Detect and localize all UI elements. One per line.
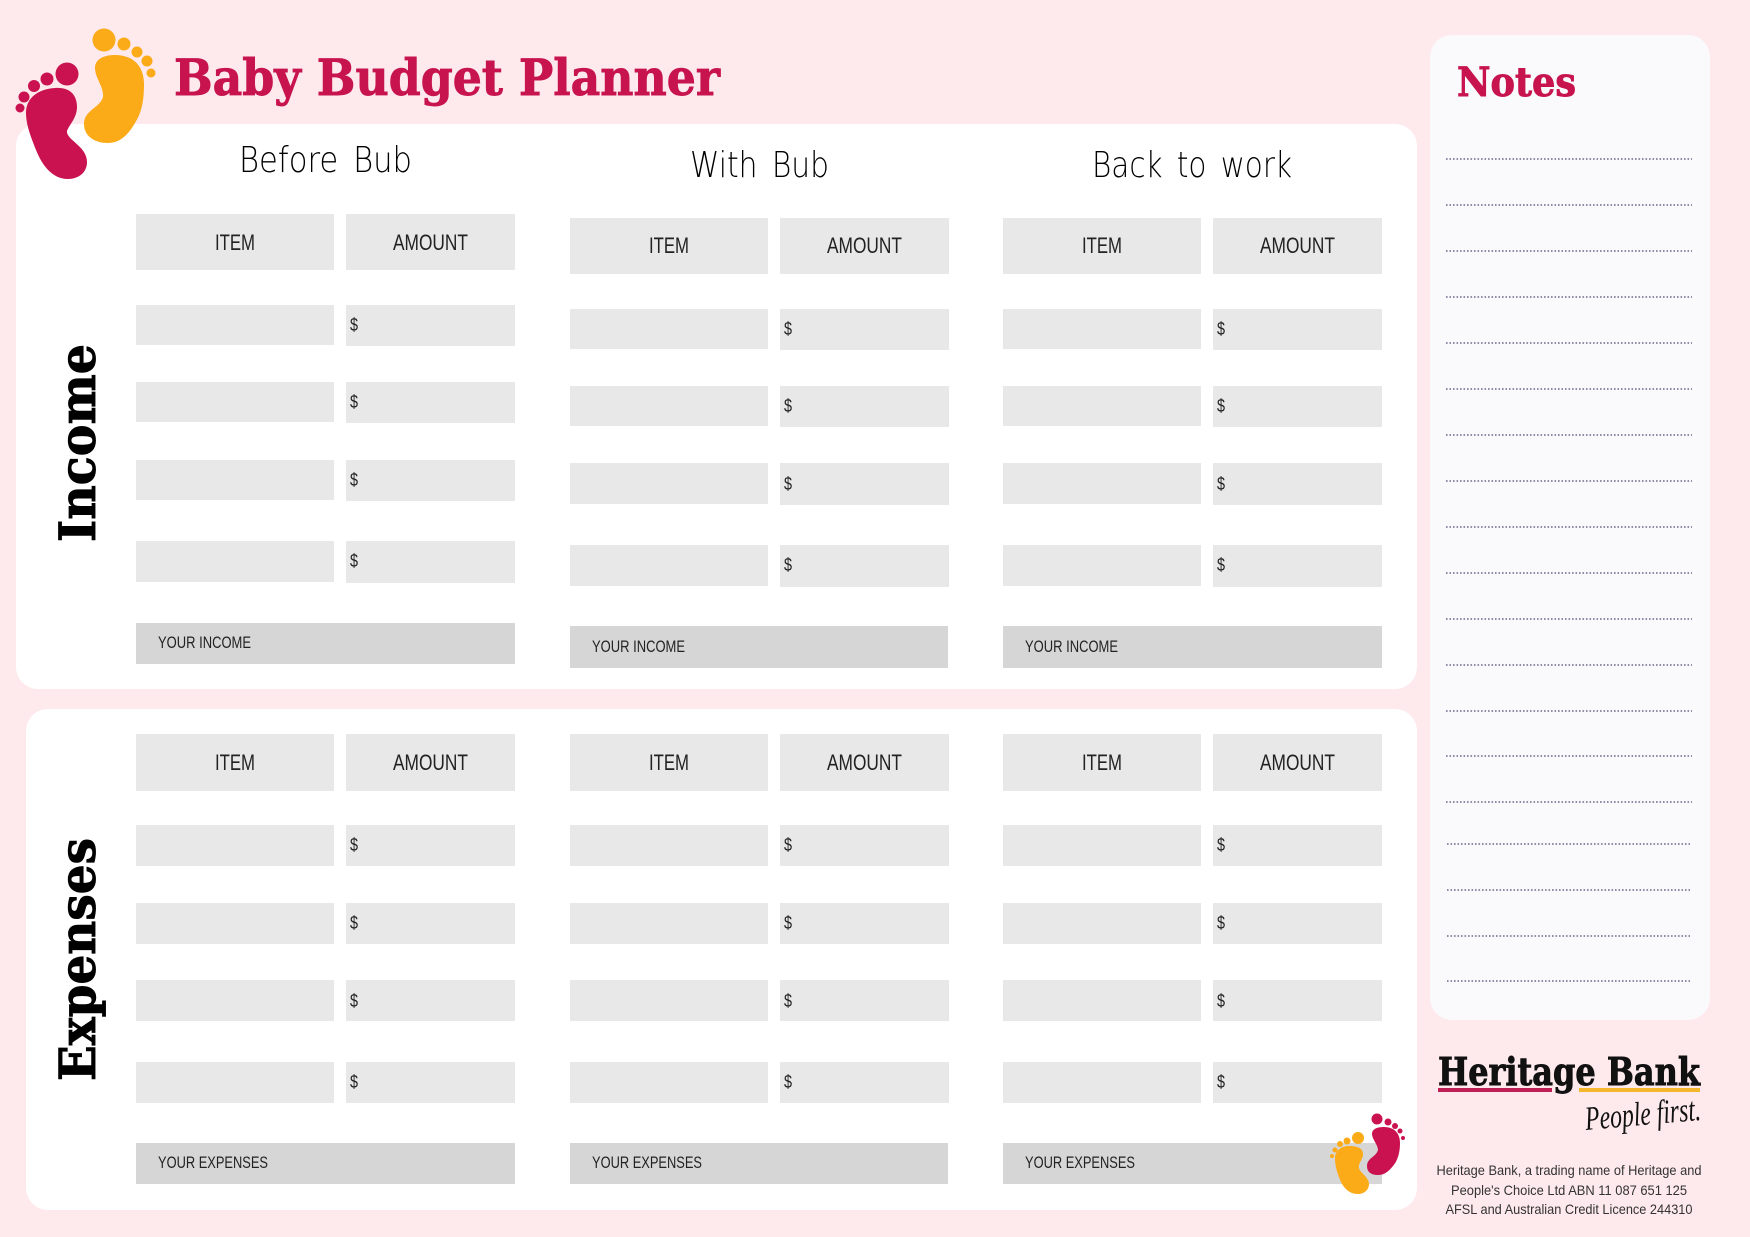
heading: notes: Notes [1457,59,1576,106]
row 1: $ [784,835,792,855]
total: your income: YOUR INCOME [158,633,251,652]
note lines [1446,159,1692,981]
row 1: $ [350,835,358,855]
row 3 [136,460,515,501]
table header: ITEM [215,750,255,775]
row 1: $ [784,319,792,339]
table header: AMOUNT [827,750,902,775]
table header [570,734,949,791]
icon: small baby feet [1330,1114,1405,1194]
icon: large baby feet [16,28,156,179]
row 4: $ [350,551,358,571]
row 2 [1003,386,1382,427]
row 4 [1003,545,1382,587]
row 4: $ [1217,555,1225,575]
row 2 [136,382,515,423]
heading: income: Income [48,344,107,542]
column: expenses before bub [136,734,515,1184]
table header [570,218,949,274]
row 2: $ [784,913,792,933]
row 3: $ [784,474,792,494]
row 4 [1003,1062,1382,1103]
column: income before bub [136,140,515,664]
total: your income [1003,626,1382,668]
row 2: $ [350,392,358,412]
table header [1003,218,1382,274]
row 1: $ [350,315,358,335]
table header: AMOUNT [827,233,902,258]
column: income with bub [570,145,949,668]
panel: notes [1430,35,1710,1020]
table header: AMOUNT [1260,750,1335,775]
legal text [1436,1162,1702,1217]
table header: ITEM [1082,233,1122,258]
row 2 [570,386,949,427]
row 3 [570,980,949,1021]
column heading: back to work: Back to work [1092,145,1292,186]
legal text: AFSL and Australian Credit Licence 244310 [1446,1201,1693,1217]
row 4: $ [1217,1072,1225,1092]
row 3: $ [350,470,358,490]
column: expenses with bub [570,734,949,1184]
legal text: People's Choice Ltd ABN 11 087 651 125 [1451,1182,1687,1198]
row 4 [570,1062,949,1103]
row 4: $ [784,1072,792,1092]
logo: Heritage Bank: People first. [1583,1091,1702,1138]
table header: AMOUNT [393,230,468,255]
row 3: $ [1217,474,1225,494]
total: your income: YOUR INCOME [1025,637,1118,656]
total: your expenses: YOUR EXPENSES [158,1153,268,1172]
row 1 [570,309,949,350]
total: your expenses: YOUR EXPENSES [1025,1153,1135,1172]
total: your expenses [570,1143,948,1184]
panel: income [16,124,1417,689]
table header [136,734,515,791]
table header: ITEM [649,233,689,258]
heading: expenses: Expenses [48,838,107,1081]
row 1 [1003,825,1382,866]
table header: ITEM [215,230,255,255]
logo: Heritage Bank [1438,1049,1702,1138]
total: your expenses [136,1143,515,1184]
row 1 [136,825,515,866]
title: Baby Budget Planner [174,48,721,107]
table header [1003,734,1382,791]
row 2 [136,903,515,944]
total: your income [570,626,948,668]
total: your income [136,623,515,664]
row 2: $ [1217,396,1225,416]
row 1: $ [1217,835,1225,855]
column heading: with bub: With Bub [690,145,829,186]
row 3: $ [784,991,792,1011]
row 4 [570,545,949,587]
row 4 [136,1062,515,1103]
row 4: $ [350,1072,358,1092]
row 3 [1003,980,1382,1021]
column heading: before bub: Before Bub [239,140,412,181]
total: your income: YOUR INCOME [592,637,685,656]
legal text: Heritage Bank, a trading name of Heritage and [1436,1162,1702,1178]
row 2: $ [350,913,358,933]
row 1 [1003,309,1382,350]
column: income back to work [1003,145,1382,668]
row 3 [570,463,949,505]
row 3 [136,980,515,1021]
row 4 [136,541,515,583]
row 2 [1003,903,1382,944]
row 3 [1003,463,1382,505]
table header: AMOUNT [393,750,468,775]
table header: ITEM [649,750,689,775]
row 2: $ [1217,913,1225,933]
logo: Heritage Bank: Heritage Bank [1438,1049,1701,1094]
row 1 [136,305,515,346]
table header: AMOUNT [1260,233,1335,258]
row 1 [570,825,949,866]
total: your expenses [1003,1143,1382,1184]
table header [136,214,515,270]
column: expenses back to work [1003,734,1382,1184]
panel: expenses [26,709,1417,1210]
total: your expenses: YOUR EXPENSES [592,1153,702,1172]
row 4: $ [784,555,792,575]
row 2: $ [784,396,792,416]
row 2 [570,903,949,944]
table header: ITEM [1082,750,1122,775]
row 3: $ [1217,991,1225,1011]
row 1: $ [1217,319,1225,339]
row 3: $ [350,991,358,1011]
